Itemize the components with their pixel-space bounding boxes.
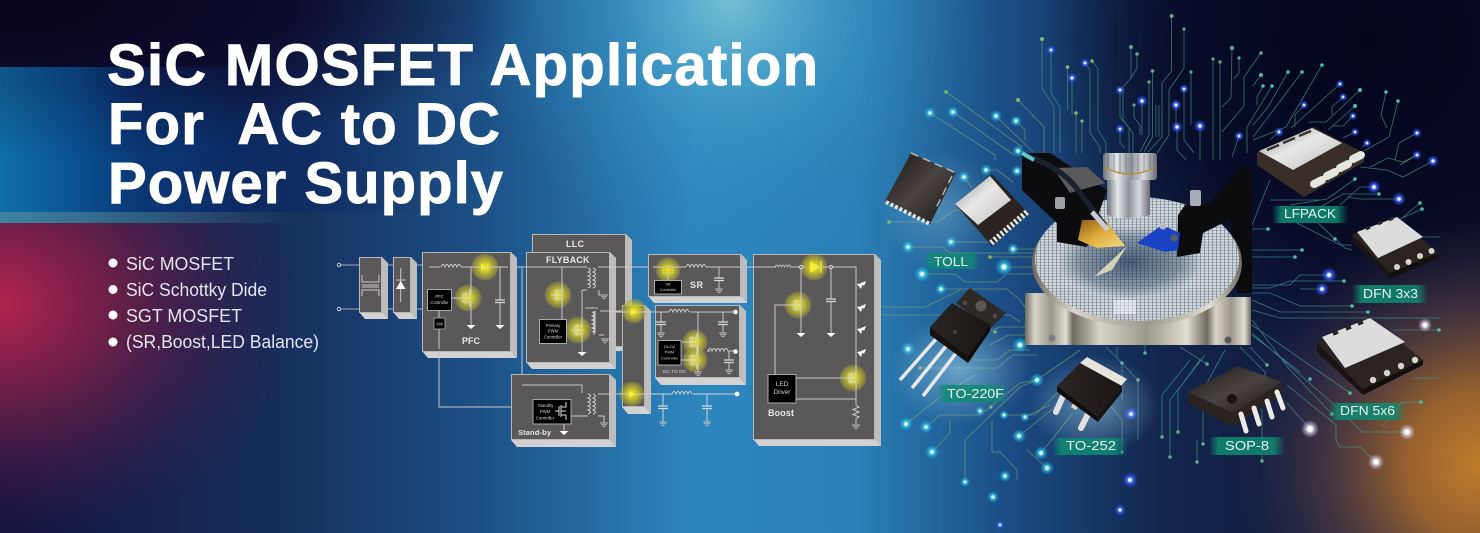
block: rectifier <box>393 257 417 319</box>
label: DFN 5x6: DFN 5x6 <box>1340 403 1395 418</box>
label: TOLL <box>924 253 980 269</box>
chip: TOLL pad face <box>955 174 1028 246</box>
block: LLC: LLC <box>566 239 584 249</box>
bullet list <box>108 253 319 352</box>
block: Stand-by <box>511 374 616 447</box>
label: TO-252 <box>1052 438 1127 455</box>
right probe arm <box>1137 168 1252 257</box>
block: PFC: SW <box>436 322 443 326</box>
photo: wafer probe station <box>1022 153 1252 345</box>
block: Stand-by: PWM <box>540 409 551 414</box>
block: LLC <box>532 234 632 351</box>
block: DC to DC: PWM <box>665 350 674 354</box>
label: SOP-8 <box>1209 437 1285 455</box>
label: LFPACK: LFPACK <box>1284 206 1336 221</box>
label: LFPACK <box>1272 206 1348 223</box>
block: DC to DC: DC TO DC <box>663 369 687 374</box>
wafer ring <box>1032 200 1242 326</box>
block: EMI filter transformer <box>359 257 388 319</box>
label: TO-220F: TO-220F <box>947 386 1004 401</box>
block: Boost: Boost <box>768 408 794 418</box>
right black column <box>1230 168 1252 293</box>
block: FLYBACK: FLYBACK <box>546 255 590 265</box>
title: SiC MOSFET Application <box>107 33 818 98</box>
mount screws <box>1048 334 1232 344</box>
label: TO-252: TO-252 <box>1066 438 1116 453</box>
title: For AC to DC <box>108 92 500 157</box>
objective lens <box>1103 153 1157 218</box>
block: Boost <box>746 253 881 446</box>
bullet list: SGT MOSFET <box>126 305 242 326</box>
label: DFN 3x3 <box>1352 285 1428 303</box>
title <box>107 33 818 216</box>
chip halos <box>880 150 1160 455</box>
label: DFN 3x3: DFN 3x3 <box>1363 286 1418 301</box>
input terminals <box>337 263 341 311</box>
left probe arm <box>1022 153 1125 248</box>
block: Boost: Driver <box>774 389 790 396</box>
chip: DFN 3x3 <box>1352 217 1438 279</box>
label: SOP-8: SOP-8 <box>1225 438 1269 453</box>
wire: switch to standby <box>439 351 511 407</box>
left mount block <box>1025 293 1073 345</box>
bullet list: SiC Schottky Dide <box>126 279 267 300</box>
block: DC to DC: Dc-Dc <box>664 344 675 349</box>
block: SR <box>648 254 747 303</box>
block: FLYBACK: Controller <box>544 334 563 340</box>
chip: DFN 5x6 <box>1317 317 1423 395</box>
chip: TO-220F <box>900 288 1006 396</box>
label: TO-220F <box>937 385 1008 402</box>
block: Boost: LED <box>776 381 789 388</box>
chip: LFPACK <box>1257 127 1364 197</box>
block: FLYBACK <box>526 252 616 369</box>
base cylinder <box>1073 310 1207 345</box>
right mount block <box>1207 297 1251 345</box>
chip: TO-252 <box>1056 357 1127 428</box>
bullet list: SiC MOSFET <box>126 253 234 274</box>
wafer <box>1035 197 1239 321</box>
circuit node dots <box>887 14 1441 530</box>
block: PFC <box>422 252 517 358</box>
block: SR: Controller <box>660 288 677 292</box>
block: Stand-by: Controller <box>536 416 555 420</box>
wires: primary bus <box>517 267 648 393</box>
block: Stand-by: Standby <box>538 403 554 408</box>
block diagram <box>337 234 881 447</box>
block: SR: SR <box>690 280 704 290</box>
block: PFC: PFC <box>462 336 480 346</box>
output filter <box>651 392 739 426</box>
label: TOLL: TOLL <box>934 254 968 269</box>
block: rectifier diodes <box>610 298 672 414</box>
block: DC to DC <box>655 305 746 385</box>
circuit traces <box>882 16 1440 480</box>
chip: SOP-8 <box>1188 366 1283 431</box>
block: SR: SR <box>665 282 671 286</box>
title: Power Supply <box>108 151 503 216</box>
block: PFC: Controller <box>430 300 449 305</box>
block: PFC: PFC <box>435 294 444 299</box>
bullet list: (SR,Boost,LED Balance) <box>126 331 319 352</box>
block: DC to DC: Controller <box>661 356 679 360</box>
input wires <box>341 265 422 309</box>
block: FLYBACK: Primary <box>546 323 561 328</box>
label: DFN 5x6 <box>1329 403 1406 420</box>
block: FLYBACK: PWM <box>548 328 559 334</box>
chip: TOLL dark face <box>885 153 956 224</box>
block: Stand-by: Stand-by <box>518 428 552 437</box>
